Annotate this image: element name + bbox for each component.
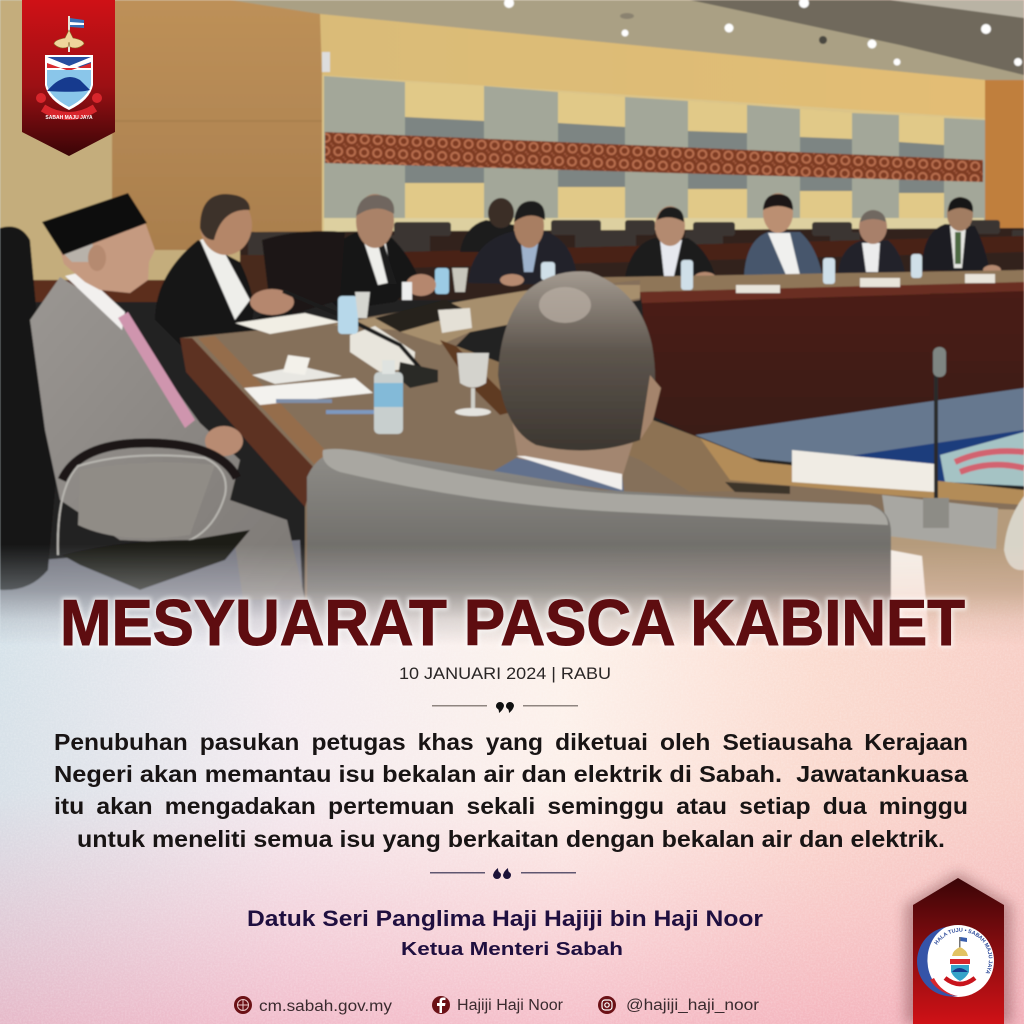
room walls and ceiling [0,0,1024,650]
delegate: centre [468,201,576,286]
speaker name: Datuk Seri Panglima Haji Hajiji bin Haji Noor [247,906,763,931]
face and grey hair [60,222,155,293]
divider: closing quote [430,868,576,879]
near leather chair [307,449,891,650]
conference table [180,280,1024,650]
crest: motto ribbon [36,93,102,121]
water bottle [374,360,403,434]
facebook name: Hajiji Haji Noor [457,997,563,1014]
drinking glass [455,353,491,416]
title: MESYUARAT PASCA KABINET [60,586,965,659]
delegate: blue suit [744,193,822,282]
pink tie [118,312,195,428]
banner ribbon [22,0,115,156]
quote body text: itu akan mengadakan pertemuan sekali seminggu atau setiap dua minggu [54,793,968,819]
banner: Sabah crest top left [22,0,115,156]
icon: facebook [432,996,450,1014]
title: MESYUARAT PASCA KABINET [60,586,965,659]
delegate: suit five [626,206,716,278]
neck [512,420,640,484]
background water bottles [435,254,922,294]
back table and front panel [560,270,1024,436]
far bottle and glass [338,268,468,334]
delegate: rear seated [460,198,515,252]
banner: vision logo bottom right [898,868,1018,1024]
round logo [917,925,994,997]
papers and pens [235,313,374,414]
crest: shield [45,55,93,110]
thin crown spot [539,287,591,323]
instagram handle: @hajiji_haji_noor [626,997,759,1014]
armrest with chrome rim [58,443,250,590]
quote body text: untuk meneliti semua isu yang berkaitan dengan bekalan air dan elektrik. [77,826,945,852]
icon: globe [234,996,252,1014]
delegate: right end [922,197,1001,275]
ceiling lights [322,0,1022,72]
hair [498,271,655,450]
chair left high back [0,226,56,590]
background table band [240,228,1024,300]
round logo: HALA TUJU • SABAH MAJU JAYA [934,928,993,974]
crest: flag and pole [68,16,84,52]
speaker role: Ketua Menteri Sabah [401,938,623,959]
background delegates row [460,193,1001,286]
quote body text: Penubuhan pasukan petugas khas yang diketuai oleh Setiausaha Kerajaan [54,729,968,755]
rear wood backdrop strip [30,236,1024,302]
near attendee from behind [492,271,661,492]
hand [205,426,243,456]
chair behind second delegate [262,231,345,315]
tissue box and microphone arm [283,291,472,388]
meeting room photograph [0,0,1024,650]
banner shadow [905,872,1012,1024]
crest: arms [54,30,84,48]
delegate: dark suit beside microphone [333,194,437,306]
name plate, microphone and base [725,347,1024,650]
chairman in grey suit and songkok [30,193,305,600]
floor carpet under chairman [0,539,303,634]
delegate: second man [155,194,294,350]
quote body text [54,729,969,852]
grey suit [30,277,305,600]
date: 10 JANUARI 2024 | RABU [399,664,611,683]
lower trouser highlight [78,462,215,538]
songkok cap [42,193,147,255]
banner ribbon [913,878,1004,1024]
quote body text: Negeri akan memantau isu bekalan air dan elektrik di Sabah. Jawatankuasa [54,761,969,787]
divider: opening quote [432,702,578,713]
carved wooden frieze [325,132,983,182]
footer social links [234,996,759,1015]
website link: cm.sabah.gov.my [259,998,392,1015]
delegate: glasses [838,210,905,274]
ear and glasses [640,375,661,440]
carpet and rug [695,388,1024,486]
collar and jacket [492,458,624,492]
shirt collar [65,272,125,330]
wall panels [324,76,985,232]
background chairs [248,220,1024,260]
crest: motto ribbon: SABAH MAJU JAYA [45,115,93,121]
icon: instagram [598,996,616,1014]
